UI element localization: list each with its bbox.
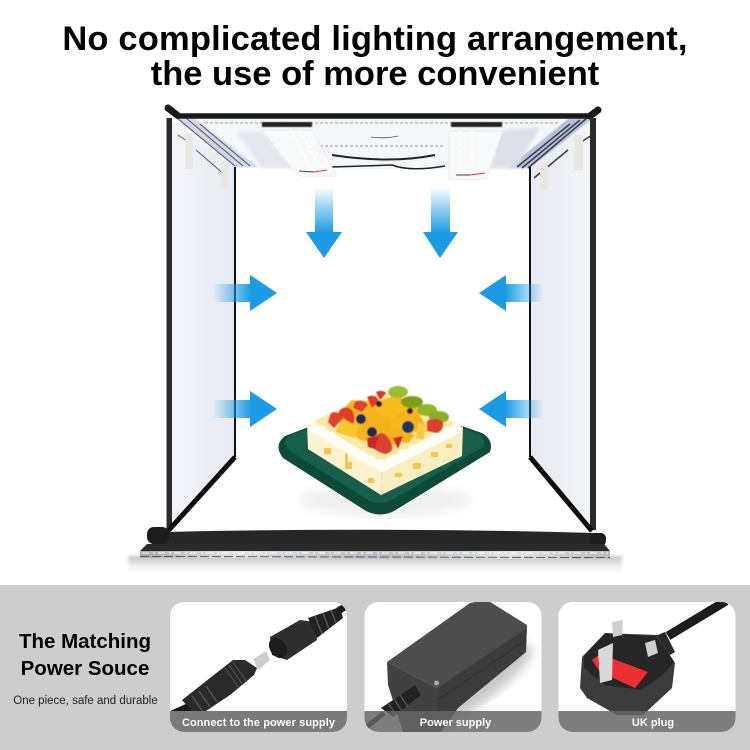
clips bbox=[185, 133, 583, 191]
light box tent bbox=[128, 108, 622, 576]
ground shadow bbox=[128, 556, 622, 576]
frame edges bbox=[166, 108, 598, 531]
caption: Power supply bbox=[420, 717, 492, 729]
strawberries bbox=[372, 433, 392, 454]
icon: UK plug bbox=[580, 601, 726, 715]
arrow: upper right, left bbox=[479, 275, 543, 311]
cake top bbox=[310, 392, 462, 468]
caption bar bbox=[170, 711, 347, 732]
card: power supply bbox=[364, 602, 542, 732]
cake side faces bbox=[307, 424, 382, 495]
title bbox=[62, 20, 688, 93]
title: No complicated lighting arrangement, bbox=[62, 20, 688, 58]
caption bar bbox=[364, 711, 542, 732]
icon: DC connector bbox=[168, 604, 350, 717]
arrow: top left, down bbox=[306, 187, 342, 258]
green tray bbox=[278, 415, 491, 514]
fruit bbox=[328, 386, 449, 454]
arrow: lower right, left bbox=[479, 391, 543, 427]
card: connector bbox=[168, 602, 350, 732]
arrow: upper left, right bbox=[213, 275, 277, 311]
right side panel bbox=[530, 118, 594, 528]
kiwi bbox=[388, 386, 408, 398]
card: UK plug bbox=[558, 601, 736, 732]
left side panel bbox=[170, 118, 235, 528]
ceiling bbox=[172, 118, 592, 178]
power source subtext: One piece, safe and durable bbox=[13, 695, 158, 707]
title: the use of more convenient bbox=[151, 55, 600, 93]
bottom grey band bbox=[0, 585, 750, 750]
left LED strip bbox=[262, 122, 337, 176]
blueberries bbox=[356, 414, 366, 424]
power source heading bbox=[19, 630, 151, 680]
cake on green tray bbox=[278, 386, 491, 516]
cream border bbox=[307, 420, 462, 472]
bottom bar bbox=[140, 527, 610, 551]
tray shadow bbox=[300, 484, 470, 516]
power source heading: Power Souce bbox=[21, 657, 149, 680]
caption: Connect to the power supply bbox=[182, 717, 336, 729]
right LED strip bbox=[449, 122, 503, 180]
icon: adapter bbox=[366, 602, 536, 732]
caption: UK plug bbox=[632, 717, 674, 729]
arrow: lower left, right bbox=[213, 391, 277, 427]
silver mat bbox=[140, 551, 610, 559]
power source heading: The Matching bbox=[19, 630, 151, 653]
caption bar bbox=[558, 711, 736, 732]
arrow: top right, down bbox=[423, 187, 458, 258]
